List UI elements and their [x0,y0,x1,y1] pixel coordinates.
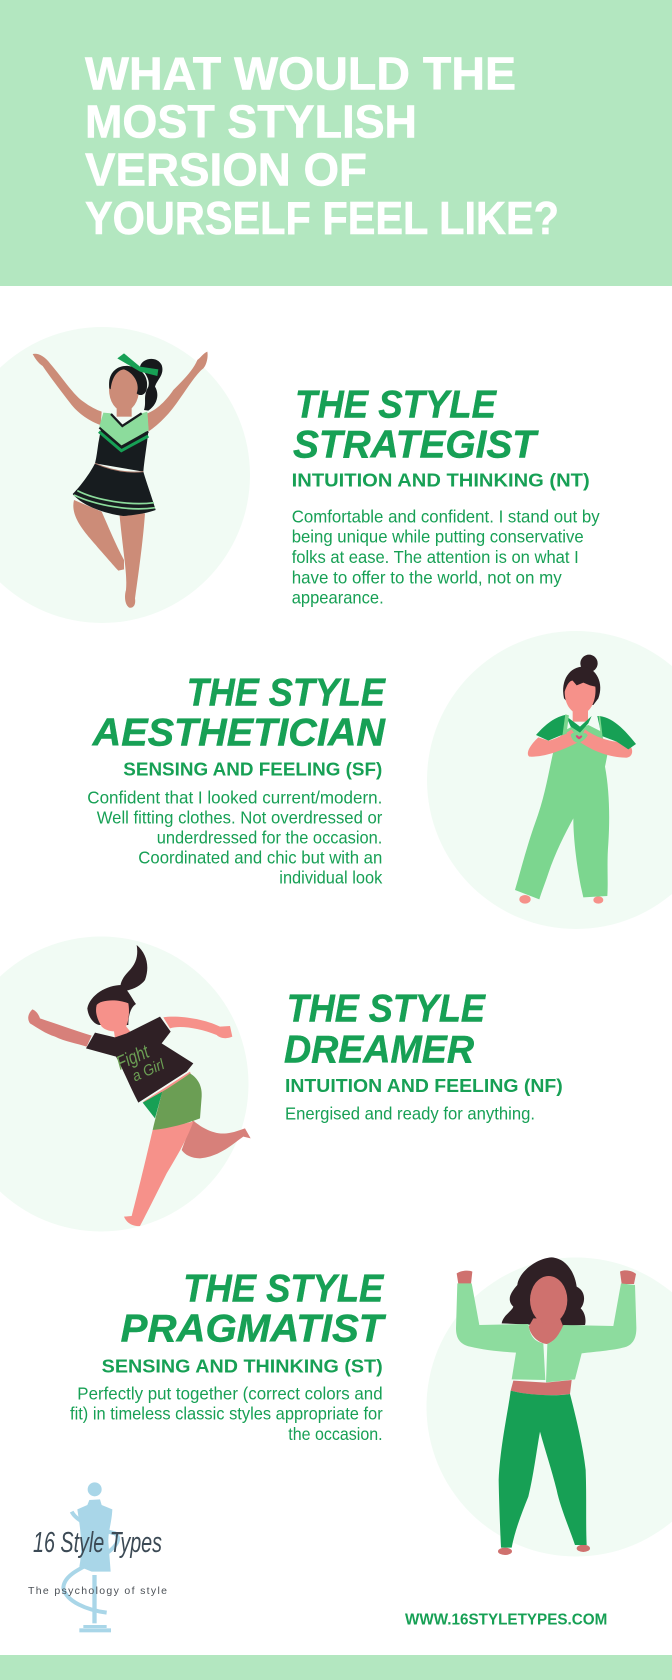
panel: the style strategist [0,327,600,623]
heading: THE STYLE [287,988,486,1031]
title: WHAT WOULD THE [85,47,516,99]
heading: DREAMER [284,1029,474,1072]
heading: THE STYLE [187,672,386,715]
subheading: INTUITION AND FEELING (NF) [285,1076,563,1096]
background circle [0,327,250,623]
shirt lettering [113,1041,168,1085]
title: MOST STYLISH [85,96,417,148]
description: appearance. [292,587,384,607]
description: Energised and ready for anything. [285,1103,535,1123]
heading: AESTHETICIAN [92,711,386,754]
background circle [426,1258,672,1556]
description: Confident that I looked current/modern. [87,787,382,807]
description: fit) in timeless classic styles appropriate for [70,1404,383,1424]
description: have to offer to the world, not on my [292,567,562,587]
logo tagline: The psychology of style [28,1585,167,1597]
shirt lettering: a Girl [130,1056,168,1085]
icon: dress form mannequin [63,1482,118,1632]
shirt lettering: Fight [113,1041,154,1075]
description: being unique while putting conservative [292,527,584,547]
description: underdressed for the occasion. [157,827,382,847]
illustration: running woman [28,945,251,1226]
subheading: SENSING AND FEELING (SF) [123,760,382,780]
illustration: woman in overalls [515,655,636,904]
description: Well fitting clothes. Not overdressed or [97,807,383,827]
heading: PRAGMATIST [121,1308,387,1351]
description: Perfectly put together (correct colors and [77,1383,383,1403]
heading [92,672,386,754]
description [292,507,600,607]
background circle [427,631,672,929]
illustration: woman flexing [456,1257,636,1555]
title: YOURSELF FEEL LIKE? [85,192,559,244]
description: Comfortable and confident. I stand out by [292,507,600,527]
description [70,1383,383,1444]
description: Coordinated and chic but with an [138,847,382,867]
logo: 16 style types [28,1482,167,1632]
title [85,47,559,244]
subheading: INTUITION AND THINKING (NT) [292,471,590,491]
description: individual look [279,867,383,887]
footer band [0,1655,672,1680]
panel: the style pragmatist [70,1257,672,1556]
illustration: cheerleader [33,352,208,608]
header banner [0,0,672,286]
panel: the style dreamer [0,936,563,1232]
description: folks at ease. The attention is on what I [292,547,579,567]
logo wordmark: 16 Style Types [33,1527,162,1559]
heading [284,988,486,1072]
website url: WWW.16STYLETYPES.COM [405,1611,607,1628]
heading: THE STYLE [295,384,497,427]
heading: STRATEGIST [293,424,539,467]
subheading: SENSING AND THINKING (ST) [102,1356,383,1376]
panel: the style aesthetician [87,631,672,929]
heading [121,1268,387,1351]
background circle [0,936,248,1232]
description: the occasion. [288,1424,383,1444]
title: VERSION OF [85,144,367,196]
description [87,787,383,887]
heading [293,384,539,467]
heading: THE STYLE [183,1268,384,1311]
